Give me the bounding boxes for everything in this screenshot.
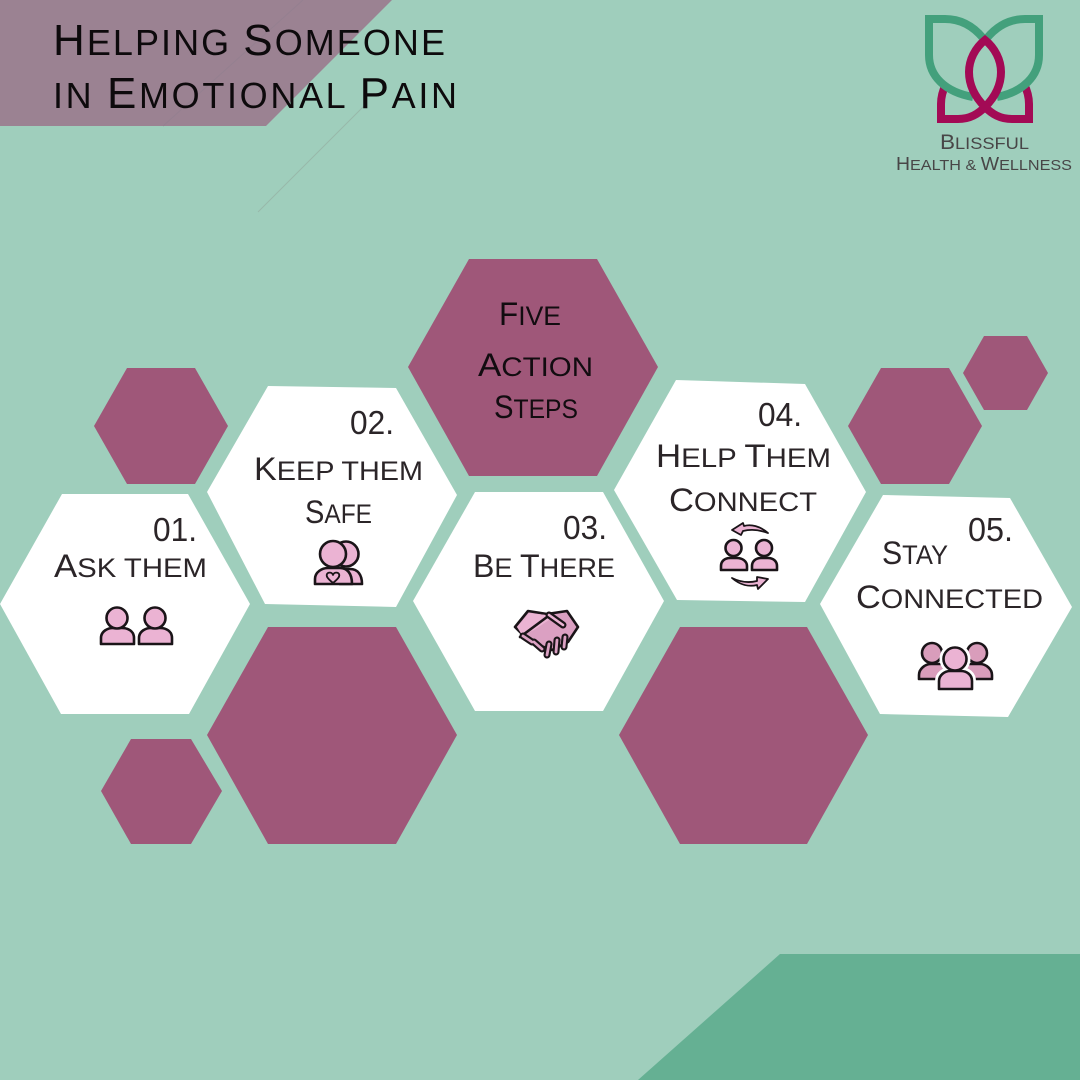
center heading: ACTION: [478, 347, 593, 383]
logo: Blissful Health & Wellness: [896, 19, 1072, 174]
step label: BE THERE: [473, 548, 615, 584]
step label: CONNECTED: [856, 579, 1043, 615]
logo mark: lotus: [929, 19, 1039, 119]
step label: SAFE: [305, 494, 372, 530]
decorative hexagon: top left: [94, 368, 228, 484]
panel: step 04 Help Them Connect: [614, 380, 866, 602]
title: [53, 16, 457, 118]
decorative hexagon: lower left large: [207, 627, 457, 844]
step label: ASK THEM: [54, 548, 207, 584]
panel: step 03 Be There: [413, 492, 664, 711]
panel: step 01 Ask them: [0, 494, 250, 714]
panel: step 05 Stay Connected: [820, 495, 1072, 717]
step label: KEEP THEM: [254, 451, 423, 487]
step label: STAY: [882, 535, 948, 571]
step number 04: 04.: [758, 396, 802, 433]
step label: CONNECT: [669, 482, 817, 518]
icon: group of three people: [919, 643, 992, 689]
decorative hexagon: bottom left small: [101, 739, 222, 844]
icon: two people with heart: [315, 541, 362, 584]
title: IN EMOTIONAL PAIN: [53, 69, 457, 118]
logo wordmark: BLISSFUL: [940, 131, 1029, 154]
step number 05: 05.: [968, 511, 1013, 548]
step label: [254, 451, 423, 530]
step number 03: 03.: [563, 509, 607, 546]
title: HELPING SOMEONE: [53, 16, 445, 65]
icon: handshake: [515, 611, 578, 655]
step number 01: 01.: [153, 511, 197, 548]
icon: two people exchanging arrows: [721, 523, 777, 589]
center heading: FIVE: [499, 296, 561, 332]
corner banner: top left: [0, 0, 392, 126]
center heading: STEPS: [494, 389, 578, 425]
decorative hexagon: lower right large: [619, 627, 868, 844]
step label: [856, 535, 1043, 615]
step label: HELP THEM: [656, 438, 831, 474]
icon: two people: [101, 608, 172, 644]
logo wordmark: [896, 131, 1072, 174]
logo wordmark: HEALTH & WELLNESS: [896, 154, 1072, 174]
decorative hexagon: right: [848, 368, 982, 484]
step label: [656, 438, 831, 518]
panel: step 02 Keep them Safe: [207, 386, 457, 607]
decorative hexagon: far right tiny: [963, 336, 1048, 410]
center hexagon: Five Action Steps: [408, 259, 658, 476]
corner shape: bottom right: [638, 954, 1080, 1080]
step number 02: 02.: [350, 404, 394, 441]
center heading: [478, 296, 593, 425]
